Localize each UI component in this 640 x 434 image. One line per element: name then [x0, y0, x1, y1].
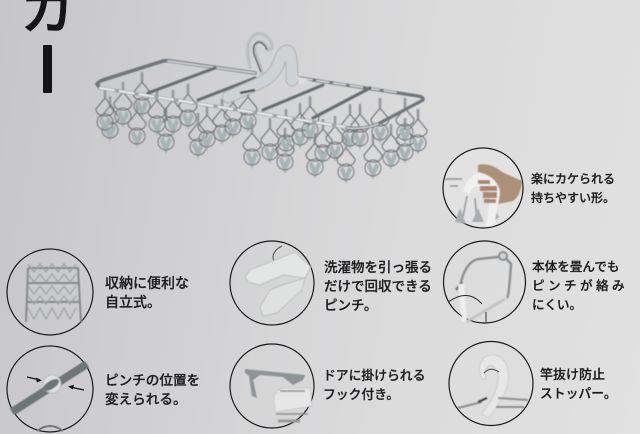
text: peg position: ピンチの位置を — [105, 373, 200, 388]
callout circle: folded hanger pegs do not tangle — [444, 241, 526, 323]
text: peg position: 変えられる。 — [105, 392, 187, 407]
text: stopper — [540, 367, 617, 401]
callout circle: hand gripping hanger — [443, 148, 523, 228]
callout circle: movable peg position on bar — [7, 346, 93, 432]
text: pull-to-collect peg: ピンチ。 — [324, 298, 377, 313]
text: door hook: フック付き。 — [323, 387, 399, 402]
text: pull-to-collect peg — [324, 260, 432, 313]
text: easy grip — [531, 172, 615, 205]
callout circle: door hook — [230, 344, 314, 428]
hanger frame bars — [97, 61, 423, 128]
text: self-standing: 収納に便利な — [105, 275, 189, 291]
text: peg position — [105, 373, 200, 407]
text: door hook — [323, 368, 425, 402]
text: no tangling — [532, 260, 628, 312]
text: no tangling: ピンチが絡み — [532, 279, 628, 293]
hanger centre body and hook — [228, 34, 312, 97]
text: easy grip: 持ちやすい形。 — [531, 191, 615, 205]
pegs hanging from the frame — [96, 72, 427, 184]
text: no tangling: 本体を畳んでも — [532, 260, 620, 274]
text: pull-to-collect peg: 洗濯物を引っ張る — [324, 260, 432, 275]
text: pull-to-collect peg: だけで回収できる — [324, 279, 432, 294]
text: stopper: 竿抜け防止 — [540, 367, 605, 382]
title: vertical long-vowel mark — [43, 45, 52, 93]
text: door hook: ドアに掛けられる — [323, 368, 425, 383]
text: self-standing: 自立式。 — [105, 294, 161, 310]
callout circle: pull-to-collect peg close-up — [230, 241, 314, 325]
text: stopper: ストッパー。 — [540, 386, 617, 401]
callout circle: anti-slip stopper hook — [449, 342, 533, 426]
callout circle: self-standing storage — [7, 249, 93, 335]
product photo: folding clothes hanger with pegs — [96, 34, 427, 184]
text: self-standing — [105, 275, 189, 310]
text: easy grip: 楽にカケられる — [531, 172, 615, 186]
text: no tangling: にくい。 — [532, 298, 582, 312]
